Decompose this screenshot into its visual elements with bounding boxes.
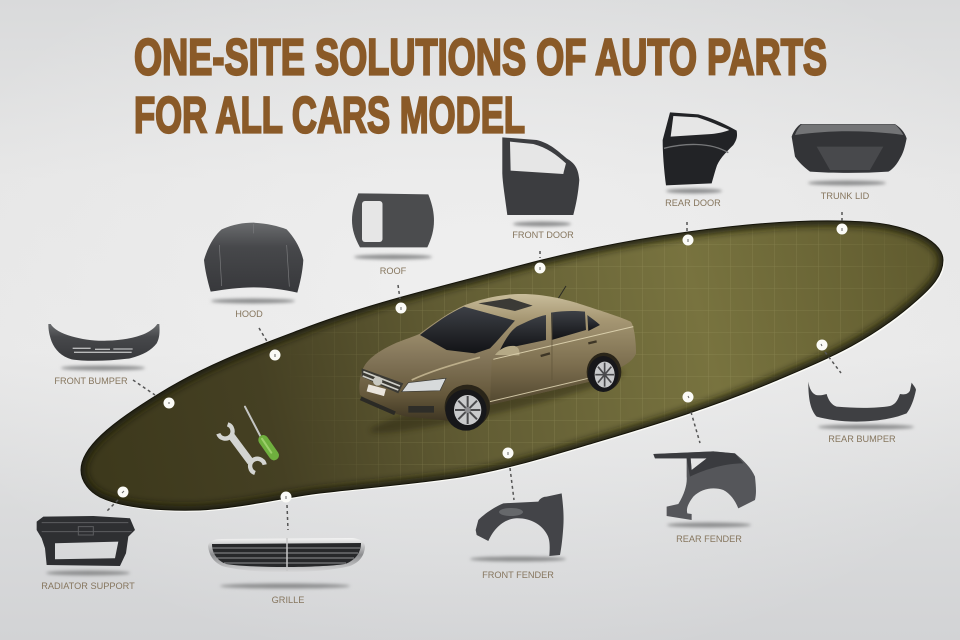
part: radiator support xyxy=(37,516,135,591)
label: rear door: REAR DOOR xyxy=(665,198,721,208)
car sunroof xyxy=(478,298,533,311)
label: front fender: FRONT FENDER xyxy=(482,570,554,580)
part: rear bumper xyxy=(808,382,916,444)
part: trunk lid xyxy=(792,124,907,201)
car side windows xyxy=(500,311,600,350)
part: rear door xyxy=(663,112,737,208)
title: FOR ALL CARS MODEL xyxy=(134,86,525,144)
icon: screwdriver xyxy=(245,407,274,455)
connector lines xyxy=(107,212,842,530)
olive elliptical platform xyxy=(70,210,950,520)
part: roof xyxy=(352,193,434,276)
car mirror xyxy=(495,346,519,355)
label: trunk lid: TRUNK LID xyxy=(821,191,870,201)
part: front fender xyxy=(470,493,566,580)
label: rear bumper: REAR BUMPER xyxy=(828,434,896,444)
icon: wrench xyxy=(218,424,265,473)
label: grille: GRILLE xyxy=(272,595,304,605)
car windshield xyxy=(420,307,515,353)
icon: wrench and screwdriver xyxy=(218,407,274,473)
label: hood: HOOD xyxy=(235,309,263,319)
part: grille xyxy=(208,538,365,605)
label: radiator support: RADIATOR SUPPORT xyxy=(41,581,135,591)
part: hood xyxy=(204,223,303,319)
car grille and headlight xyxy=(361,368,446,413)
car body highlights xyxy=(412,313,633,402)
car side panel xyxy=(490,327,636,405)
label: roof: ROOF xyxy=(380,266,407,276)
marker dots xyxy=(118,224,848,502)
car rear wheel xyxy=(587,353,621,392)
part: front door xyxy=(502,137,579,240)
label: front bumper: FRONT BUMPER xyxy=(54,376,128,386)
car front wheel xyxy=(445,385,490,431)
car xyxy=(359,286,636,442)
part: rear fender xyxy=(653,451,756,544)
part: front bumper xyxy=(48,324,160,386)
title xyxy=(134,28,827,144)
label: rear fender: REAR FENDER xyxy=(676,534,742,544)
label: front door: FRONT DOOR xyxy=(512,230,574,240)
